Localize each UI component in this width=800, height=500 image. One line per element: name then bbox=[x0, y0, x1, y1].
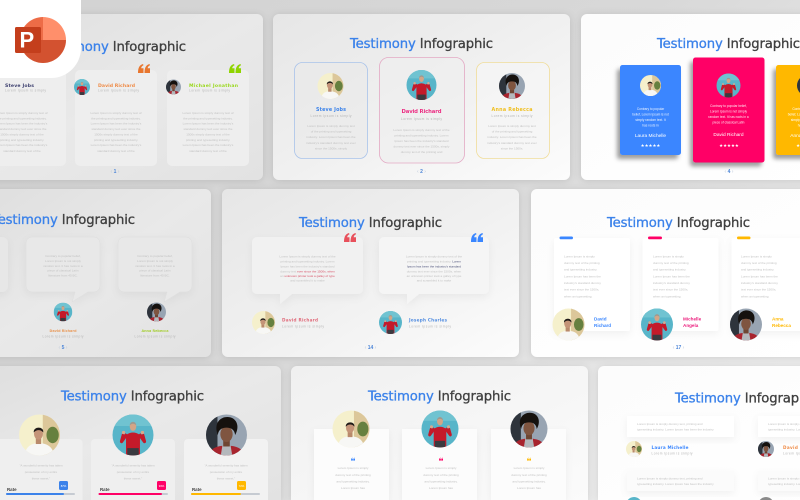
card: Laura Michelle blue: belief, Lorem Ipsum is not bbox=[632, 112, 669, 116]
card: Anna Rebecca outlined: industry. Lorem Ipsum has been the bbox=[487, 135, 537, 139]
testimonial: David Richard with quote: David Richard bbox=[282, 318, 318, 322]
row: lower right bbox=[758, 471, 800, 500]
card: David Richard: printing and typesetting industry. bbox=[94, 138, 138, 142]
testimonial: Anna Rebecca: piece of classical Latin bbox=[140, 268, 171, 272]
card: Anna Rebecca with yellow bar: and typesetting industry. bbox=[741, 268, 774, 272]
card: David Richard with blue bar: dummy text of the printing bbox=[564, 261, 600, 265]
card: rate 93 pink: “A wonderful serenity has taken bbox=[111, 464, 155, 468]
card: Michelle Angela with pink bar: Lorem Ipsum is simply bbox=[653, 254, 684, 258]
card: Michael Jonathan: Michael Jonathan bbox=[189, 83, 238, 89]
testimonial: Anna Rebecca bbox=[118, 237, 192, 338]
card: Anna Rebecca outlined: of the printing and typesetting bbox=[492, 130, 533, 134]
testimonial: David Richard: Lorem Ipsum is simply bbox=[42, 334, 84, 338]
testimonial: Anna Rebecca: Lorem Ipsum is simply bbox=[134, 334, 176, 338]
quote card slide title: Testimony Infographic bbox=[367, 390, 511, 404]
card: Anna Rebecca outlined bbox=[476, 62, 550, 158]
page number 1: ‹ 1 › bbox=[111, 169, 120, 175]
card: David Richard with blue bar: Richard bbox=[594, 323, 611, 328]
testimonial: Anna Rebecca: Lorem Ipsum is not simply bbox=[137, 259, 173, 263]
slide 4 title: Testimony Infographic bbox=[656, 37, 800, 52]
card: rate 72 yellow bbox=[184, 414, 268, 500]
card: Anna Rebecca outlined: Lorem Ipsum is simply bbox=[492, 114, 533, 118]
card: David Richard outlined, emphasised: Ipsum has been the industry's standard bbox=[395, 139, 449, 143]
testimonial: David Richard: Lorem Ipsum is not simply bbox=[45, 259, 81, 263]
row: Laura Michelle: Lorem Ipsum is simply dummy text, printing and bbox=[637, 422, 703, 426]
card: Michael Jonathan bbox=[166, 64, 249, 166]
card: rate 87 blue: possession of my entire bbox=[25, 470, 58, 474]
card: David Richard pink: Contrary to popular belief, bbox=[710, 104, 747, 108]
testimonial: David Richard: random text. It has roots in a bbox=[43, 264, 83, 268]
page number 5: ‹ 5 › bbox=[59, 345, 68, 351]
card: Steve Jobs outlined: Lorem Ipsum is simply dummy text bbox=[307, 124, 355, 128]
card: rate 93 pink: these sweet.” bbox=[124, 476, 142, 480]
card: rate 72 yellow: 72% bbox=[239, 484, 245, 488]
card: Michael Jonathan: Lorem Ipsum is simply bbox=[189, 88, 230, 92]
card: rate 93 pink: possession of my entire bbox=[117, 470, 150, 474]
card: David Richard outlined, emphasised: Lorem Ipsum is simply dummy text of the bbox=[393, 128, 450, 132]
card: Michelle Angela with pink bar: and typesetting industry. bbox=[653, 268, 686, 272]
page number 17: ‹ 17 › bbox=[673, 345, 685, 351]
rate slide title: Testimony Infographic bbox=[60, 390, 204, 404]
card: rate 87 blue: Rate bbox=[7, 487, 17, 492]
card: David Richard: 1500s simply dummy text of the bbox=[94, 132, 138, 136]
card: David Richard with blue bar: David bbox=[594, 316, 607, 322]
row: David Richard bbox=[758, 416, 800, 457]
card: Laura Michelle blue bbox=[620, 65, 681, 155]
card: Anna Rebecca with yellow bar: Lorem Ipsum is simply bbox=[741, 254, 772, 258]
card: rate 93 pink bbox=[91, 414, 175, 500]
card: rate 72 yellow: these sweet.” bbox=[217, 476, 235, 480]
testimonial: Anna Rebecca: Anna Rebecca bbox=[142, 329, 169, 333]
card: David Richard pink bbox=[693, 58, 764, 162]
testimonial: David Richard with quote: an unknown printer took a galley of type bbox=[280, 274, 335, 278]
card: Steve Jobs: 1500s simply dummy text of the bbox=[0, 132, 44, 136]
card: rate 72 yellow: “A wonderful serenity has taken bbox=[204, 464, 248, 468]
card: quote pink bbox=[402, 410, 477, 500]
card: David Richard: Lorem Ipsum has been the industry's bbox=[91, 122, 142, 126]
card: quote yellow: dummy text of the printing bbox=[511, 473, 547, 477]
panel: slide 14, quote bubbles with avatars bbox=[222, 189, 519, 357]
card: Michelle Angela with pink bar: text ever since the 1500s, bbox=[653, 288, 688, 292]
avatar David bbox=[74, 79, 90, 95]
slide 17 title: Testimony Infographic bbox=[606, 216, 750, 231]
row: lower left: Lorem Ipsum is simply dummy text, printing and bbox=[637, 476, 703, 480]
testimonial: Joseph Charles with quote: and scrambled it to make bbox=[417, 278, 452, 282]
row: Laura Michelle: Lorem Ipsum is simply bbox=[652, 452, 693, 456]
page number 2: ‹ 2 › bbox=[417, 169, 426, 175]
card: Anna Rebecca with yellow bar bbox=[730, 236, 800, 340]
card: Anna Rebecca with yellow bar: when an typesetting. bbox=[741, 294, 770, 298]
row: Laura Michelle: Laura Michelle bbox=[652, 445, 689, 450]
card: quote blue: Lorem Ipsum has bbox=[341, 486, 365, 490]
card: Anna Rebecca with yellow bar: industry's standard dummy bbox=[741, 281, 778, 285]
card: Steve Jobs: Steve Jobs bbox=[5, 83, 34, 89]
card: quote yellow: Lorem Ipsum has bbox=[517, 486, 541, 490]
card: quote blue: dummy text of the printing bbox=[335, 473, 371, 477]
testimonial: David Richard with quote: Lorem Ipsum is simply bbox=[282, 324, 324, 328]
panel: slide 17, cards with top bars bbox=[531, 189, 800, 357]
card: David Richard outlined, emphasised bbox=[380, 58, 464, 163]
card: David Richard outlined, emphasised: dummy text of the printing and bbox=[401, 150, 443, 154]
card: David Richard pink: piece of classical Latin bbox=[713, 120, 745, 124]
card: Steve Jobs: Lorem Ipsum is simply bbox=[5, 88, 46, 92]
card: David Richard with blue bar: and typesetting industry. bbox=[564, 268, 597, 272]
card: Anna Rebecca with yellow bar: Rebecca bbox=[772, 323, 791, 328]
card: David Richard: Lorem Ipsum has been the industry's bbox=[91, 143, 142, 147]
quote mark orange bbox=[138, 64, 150, 73]
card: Anna Rebecca with yellow bar: Lorem Ipsum has been the bbox=[741, 274, 778, 278]
panel: slide with wide testimony rows bbox=[598, 366, 800, 500]
row: lower left: typesetting industry. Lorem Ipsum has been the industry bbox=[637, 482, 714, 486]
card: rate 87 blue: 87% bbox=[61, 484, 67, 488]
card: Steve Jobs outlined: Lorem Ipsum is simply bbox=[310, 114, 352, 118]
card: Steve Jobs: standard dummy text of the bbox=[3, 149, 41, 153]
card: Steve Jobs bbox=[0, 70, 66, 166]
page number 4: ‹ 4 › bbox=[725, 169, 734, 175]
card: Anna Rebecca outlined: Anna Rebecca bbox=[492, 107, 532, 113]
card: Michael Jonathan: Lorem Ipsum has been the industry's bbox=[183, 143, 234, 147]
card: David Richard with blue bar: text ever since the 1500s, bbox=[564, 288, 599, 292]
slide 1 title: Testimony Infographic bbox=[42, 40, 186, 55]
card: Michelle Angela with pink bar: industry's standard dummy bbox=[653, 281, 690, 285]
testimonial: David Richard: piece of classical Latin bbox=[48, 268, 79, 272]
testimonial: David Richard with quote bbox=[252, 233, 363, 334]
card: David Richard with blue bar: Lorem Ipsum is simply bbox=[564, 254, 595, 258]
card: David Richard: David Richard bbox=[98, 83, 135, 89]
card: David Richard pink: random text. It has roots in a bbox=[708, 115, 749, 119]
card: Michael Jonathan: printing and typesetting industry. bbox=[186, 138, 230, 142]
testimonial: Joseph Charles with quote: Lorem Ipsum is simply bbox=[409, 324, 451, 328]
card: Anna Rebecca with yellow bar: dummy text of the printing bbox=[741, 261, 777, 265]
card: Michael Jonathan: standard dummy text of the bbox=[189, 149, 227, 153]
testimonial: David Richard: David Richard bbox=[50, 329, 77, 333]
card: Steve Jobs outlined: industry's standard dummy text ever bbox=[306, 141, 356, 145]
card: David Richard outlined, emphasised: Lorem Ipsum is simply bbox=[401, 117, 442, 121]
card: quote blue: Lorem Ipsum is simply bbox=[338, 466, 369, 470]
testimonial: David Richard with quote: and scrambled it to make bbox=[290, 278, 325, 282]
card: rate 93 pink: Rate bbox=[100, 487, 110, 492]
card: rate 87 blue: these sweet.” bbox=[32, 476, 50, 480]
card: David Richard pink: Lorem Ipsum is not simply bbox=[710, 110, 747, 114]
panel: slide 5, speech bubbles bbox=[0, 189, 211, 357]
card: rate 72 yellow: Rate bbox=[192, 487, 202, 492]
card: Laura Michelle blue: ★★★★★ bbox=[641, 143, 660, 149]
testimonial: Joseph Charles with quote: Ipsum has been the industry's standard bbox=[407, 264, 461, 268]
card: Steve Jobs outlined: of the printing and typesetting bbox=[311, 130, 352, 134]
card: Anna Rebecca with yellow bar: text ever since the 1500s, bbox=[741, 288, 776, 292]
testimonial: Joseph Charles with quote: Joseph Charles bbox=[408, 318, 448, 322]
card: rate 87 blue bbox=[0, 414, 82, 500]
card: Anna yellow bbox=[776, 65, 800, 155]
card: Michelle Angela with pink bar: dummy text of the printing bbox=[653, 261, 689, 265]
card: rate 93 pink: 93% bbox=[159, 484, 165, 488]
testimonial: David Richard: Contrary to popular belief, bbox=[45, 254, 81, 258]
card: David Richard with blue bar bbox=[552, 236, 630, 340]
card: quote yellow bbox=[491, 410, 566, 500]
card: Michael Jonathan: Lorem Ipsum is simply dummy text of bbox=[182, 111, 234, 115]
badge: PowerPoint logo bbox=[0, 0, 81, 78]
card: David Richard bbox=[74, 64, 157, 166]
speech bubble left partial bbox=[0, 237, 8, 292]
testimonial: David Richard with quote: printing and typesetting industry. Lorem bbox=[281, 260, 335, 264]
testimonial: Anna Rebecca: random text. It has roots in a bbox=[135, 264, 175, 268]
testimonial: David Richard with quote: Lorem Ipsum is simply dummy text of the bbox=[279, 254, 336, 258]
card: Michael Jonathan: standard dummy text ever since the bbox=[183, 127, 233, 131]
card: Anna Rebecca with yellow bar: Anna bbox=[772, 316, 784, 322]
card: David Richard outlined, emphasised: David Richard bbox=[402, 109, 442, 115]
panel: slide 4, solid colour cards bbox=[581, 14, 800, 180]
icon: PowerPoint pie: P bbox=[20, 28, 34, 52]
card: David Richard outlined, emphasised: printing and typesetting industry. Lorem bbox=[395, 134, 449, 138]
card: quote blue: and typesetting industry. bbox=[336, 480, 370, 484]
testimonial: Joseph Charles with quote: Lorem Ipsum is simply dummy text of the bbox=[406, 254, 462, 258]
card: Laura Michelle blue: Contrary to popular bbox=[637, 107, 665, 111]
card: David Richard: the printing and typesetting industry. bbox=[91, 116, 141, 120]
card: Michael Jonathan: 1500s simply dummy text of the bbox=[186, 132, 230, 136]
slide 14 title: Testimony Infographic bbox=[298, 216, 442, 231]
card: Steve Jobs outlined: Steve Jobs bbox=[316, 107, 346, 113]
row: lower left bbox=[627, 471, 734, 500]
page number 14: ‹ 14 › bbox=[365, 345, 377, 351]
panel: slide with quote cards under avatars bbox=[291, 366, 588, 500]
card: quote pink: dummy text of the printing bbox=[423, 473, 459, 477]
card: David Richard pink: David Richard bbox=[713, 132, 744, 138]
card: David Richard with blue bar: when an typesetting. bbox=[564, 294, 593, 298]
card: David Richard with blue bar: industry's standard dummy bbox=[564, 281, 601, 285]
card: Michael Jonathan: the printing and typesetting industry. bbox=[183, 116, 233, 120]
card: quote yellow: Lorem Ipsum is simply bbox=[514, 466, 545, 470]
card: rate 72 yellow: possession of my entire bbox=[210, 470, 243, 474]
testimonial: David Richard: literature from 45 BC. bbox=[48, 274, 78, 278]
testimonial: Joseph Charles with quote: printing and typesetting industry. Lorem bbox=[407, 260, 461, 264]
card: Steve Jobs outlined: since the 1500s, simply bbox=[315, 146, 348, 150]
testimonial: Anna Rebecca: literature from 45 BC. bbox=[140, 274, 170, 278]
card: David Richard: standard dummy text of the bbox=[97, 149, 135, 153]
card: David Richard with blue bar: Lorem Ipsum has been the bbox=[564, 274, 601, 278]
card: Anna Rebecca outlined: since the 1500s. bbox=[501, 146, 523, 150]
panel: slide 2, outlined cards bbox=[273, 14, 570, 180]
card: Michelle Angela with pink bar: Lorem Ipsum has been the bbox=[653, 274, 690, 278]
card: Michelle Angela with pink bar bbox=[641, 236, 718, 340]
testimonial: David Richard with quote: dummy text ever since the 1500s, when bbox=[280, 270, 335, 274]
card: Laura Michelle blue: simply random text. It bbox=[635, 118, 666, 122]
card: Michelle Angela with pink bar: Angela bbox=[683, 323, 699, 328]
card: David Richard: standard dummy text ever since the bbox=[91, 127, 141, 131]
card: David Richard pink: ★★★★★ bbox=[719, 143, 739, 149]
testimonial: David Richard with quote: Ipsum has been the industry's standard bbox=[281, 264, 335, 268]
panel: slide with rate bars bbox=[0, 366, 281, 500]
card: Michelle Angela with pink bar: when an typesetting. bbox=[653, 294, 682, 298]
testimonial: Joseph Charles with quote bbox=[379, 233, 489, 334]
row: Laura Michelle: typesetting industry. Lorem Ipsum has been the industry bbox=[637, 428, 714, 432]
card: David Richard: Lorem Ipsum is simply bbox=[98, 88, 139, 92]
card: David Richard outlined, emphasised: dummy text ever since the 1500s, simply bbox=[394, 144, 450, 148]
card: Laura Michelle blue: Laura Michelle bbox=[635, 133, 666, 139]
card: Steve Jobs outlined: industry. Lorem Ipsum has been the bbox=[306, 135, 356, 139]
card: Anna Rebecca outlined: industry's standard dummy text ever bbox=[487, 141, 537, 145]
quote mark green bbox=[229, 64, 241, 73]
row: Laura Michelle bbox=[626, 416, 734, 457]
card: Anna Rebecca outlined: Lorem Ipsum is simply dummy text bbox=[488, 124, 536, 128]
card: quote yellow: and typesetting industry. bbox=[512, 480, 546, 484]
card: quote pink: and typesetting industry. bbox=[424, 480, 458, 484]
card: Laura Michelle blue: has roots in bbox=[642, 124, 659, 128]
slide 2 title: Testimony Infographic bbox=[349, 37, 493, 52]
testimonial: David Richard bbox=[26, 237, 100, 338]
panel: slide 1, three testimony cards bbox=[0, 14, 263, 180]
testimonial: Joseph Charles with quote: an unknown printer took a galley of type bbox=[407, 274, 462, 278]
card: quote pink: Lorem Ipsum has bbox=[429, 486, 453, 490]
card: quote blue bbox=[314, 410, 389, 500]
card: Michelle Angela with pink bar: Michelle bbox=[683, 316, 702, 322]
testimonial: Joseph Charles with quote: dummy text ever since the 1500s, when bbox=[407, 270, 462, 274]
card: David Richard: Lorem Ipsum is simply dummy text of bbox=[90, 111, 142, 115]
avatar Michael bbox=[166, 80, 181, 94]
testimonial: Anna Rebecca: Contrary to popular belief, bbox=[137, 254, 173, 258]
card: Michael Jonathan: Lorem Ipsum has been the industry's bbox=[183, 122, 234, 126]
card: Steve Jobs: printing and typesetting industry. bbox=[0, 138, 44, 142]
card: Steve Jobs outlined bbox=[294, 62, 368, 158]
card: rate 87 blue: “A wonderful serenity has taken bbox=[19, 464, 63, 468]
card: quote pink: Lorem Ipsum is simply bbox=[426, 466, 457, 470]
